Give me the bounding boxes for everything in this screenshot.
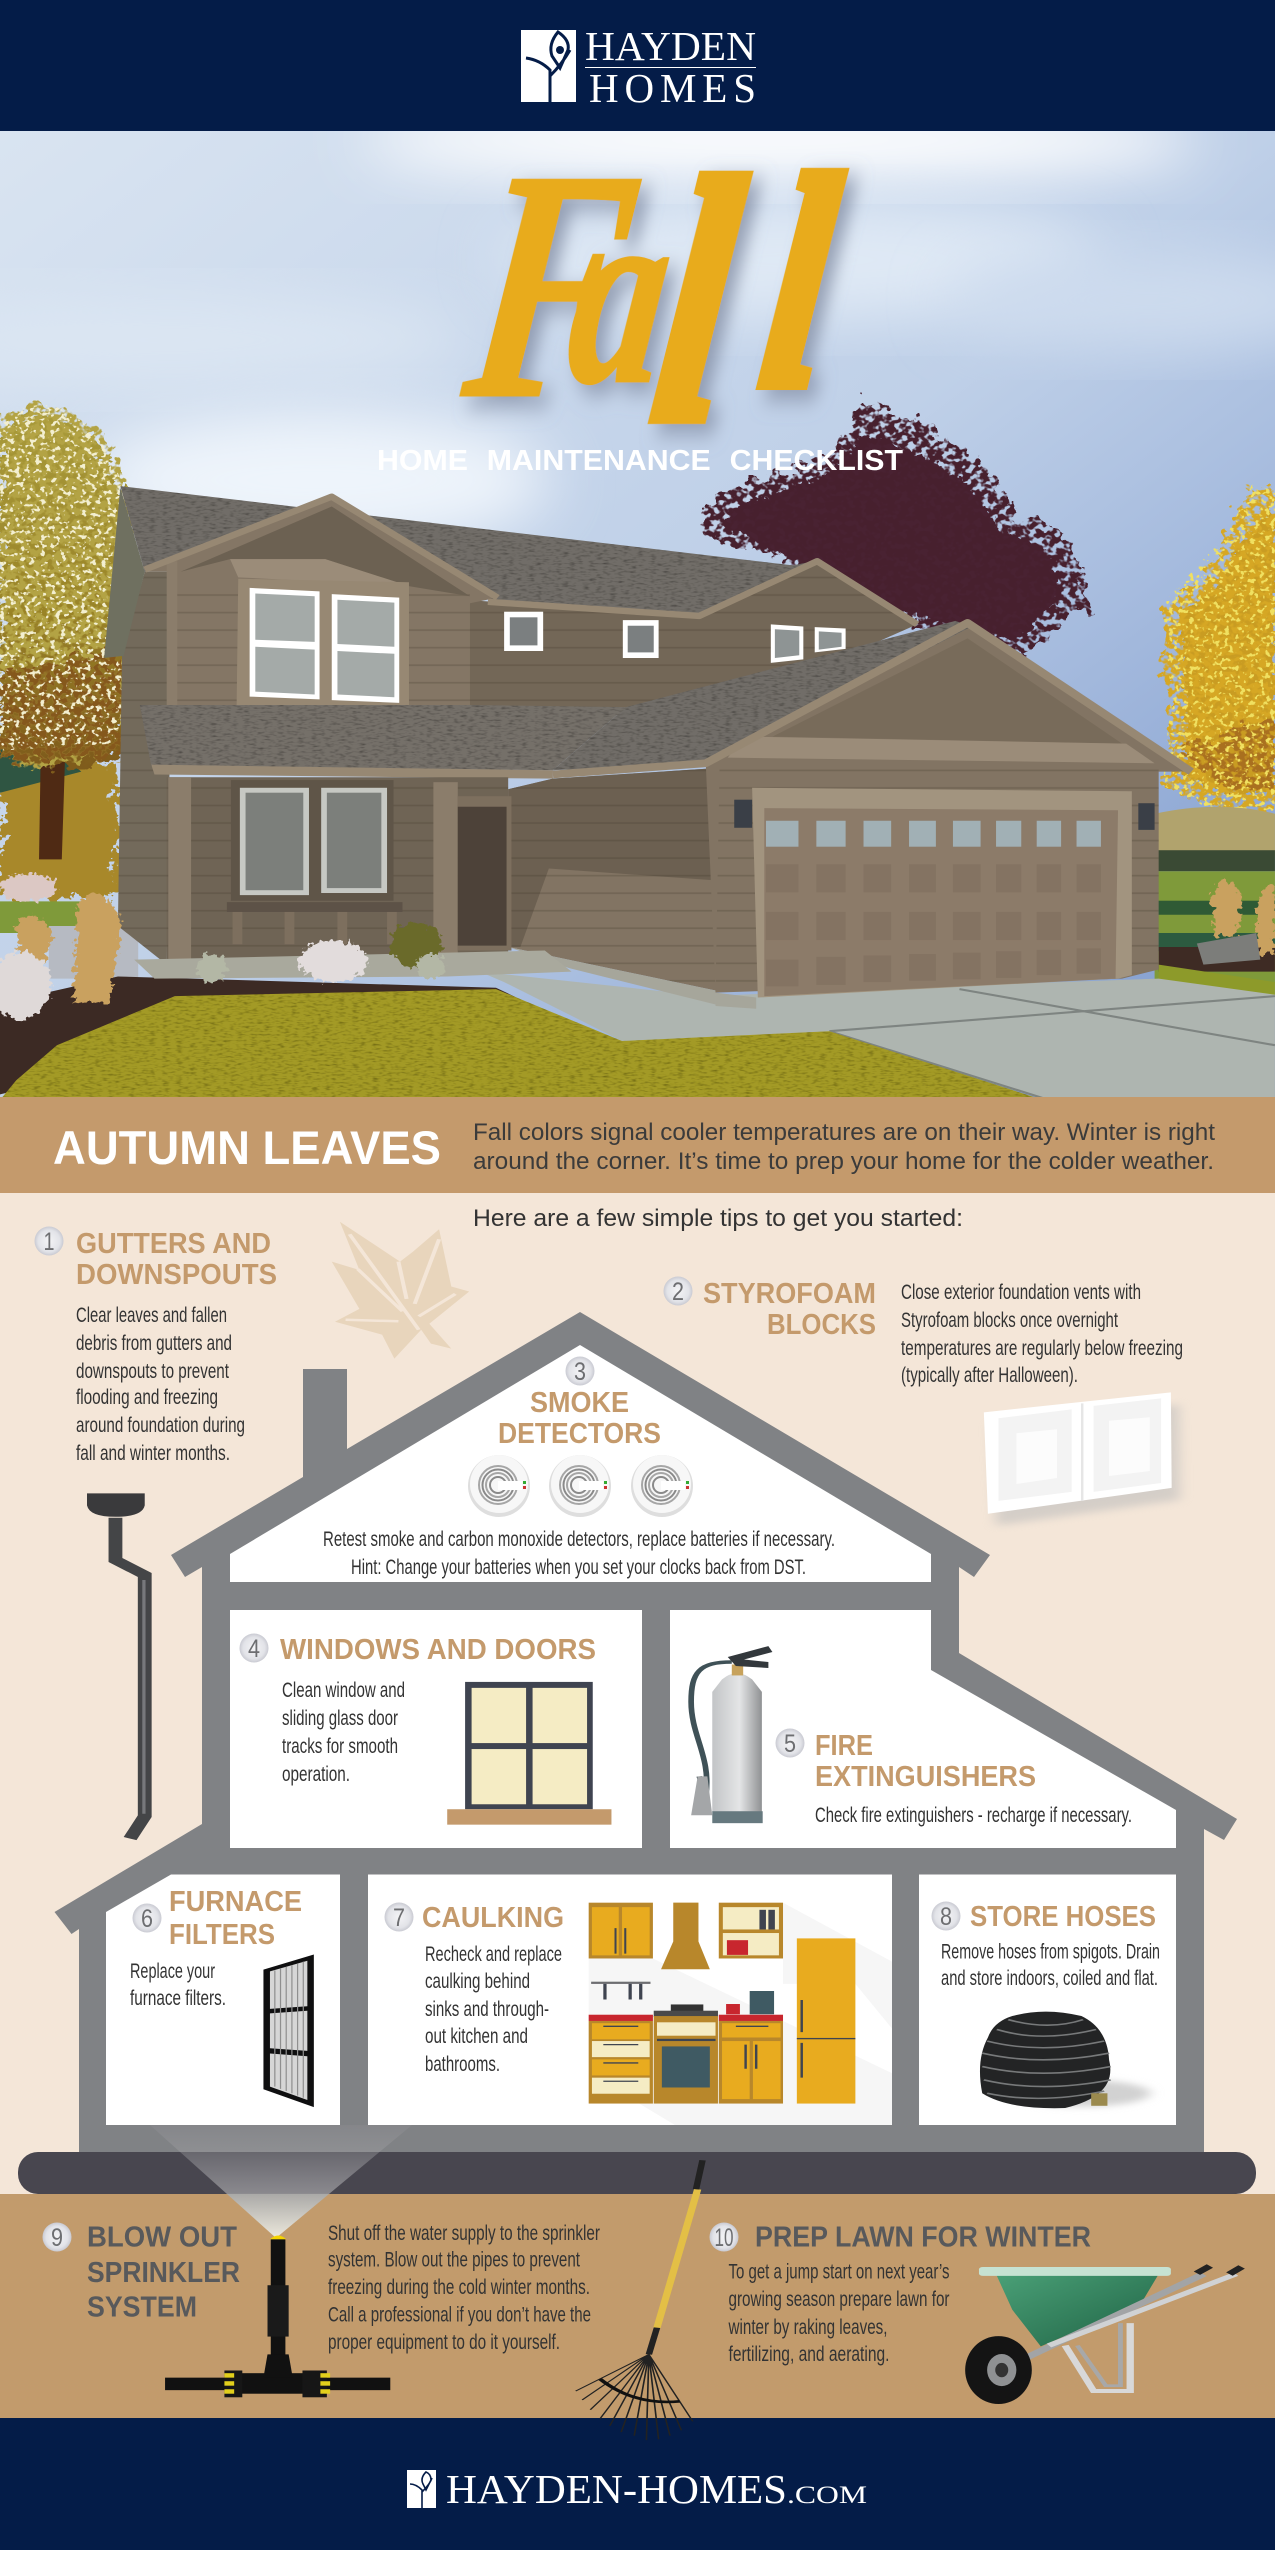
- body text: Clean window and: [282, 1679, 405, 1702]
- body text: fall and winter months.: [76, 1442, 230, 1465]
- house: garage roof: [553, 621, 972, 770]
- landscaping: shrubs and grasses: [0, 873, 1275, 1019]
- heading: BLOCKS: [767, 1309, 876, 1341]
- body text: winter by raking leaves,: [728, 2316, 888, 2339]
- icon: wheelbarrow: [965, 2266, 1242, 2404]
- body text: operation.: [282, 1763, 350, 1786]
- spotlight beam: [150, 2125, 412, 2238]
- body text: fertilizing, and aerating.: [728, 2343, 890, 2366]
- icon: logo tree pin: [407, 2470, 436, 2508]
- house: porch roof: [140, 705, 626, 770]
- body text: Styrofoam blocks once overnight: [901, 1309, 1118, 1332]
- body text: [76, 1304, 245, 1465]
- house: garage trim: [553, 623, 1191, 774]
- body text: Check fire extinguishers - recharge if necessary.: [815, 1804, 1132, 1827]
- subtitle: HOME MAINTENANCE CHECKLIST: [377, 445, 903, 477]
- heading: GUTTERS AND: [76, 1228, 271, 1260]
- foundation bar: [18, 2152, 1256, 2194]
- footer band: [0, 2418, 1275, 2550]
- header band: [0, 0, 1275, 131]
- tree: right yellow tree: [1163, 484, 1275, 814]
- icon: coiled hose: [980, 2012, 1151, 2108]
- house: upper roof: [120, 486, 821, 619]
- tips intro: Here are a few simple tips to get you started:: [473, 1205, 963, 1232]
- icon: downspout: [87, 1493, 145, 1839]
- tree: left autumn tree: [0, 405, 133, 898]
- body text: caulking behind: [425, 1970, 530, 1993]
- body text: debris from gutters and: [76, 1332, 232, 1355]
- ground: mulch, driveway and lawn: [0, 947, 1275, 1100]
- body text: Call a professional if you don’t have the: [328, 2304, 591, 2326]
- body text: Close exterior foundation vents with: [901, 1281, 1141, 1304]
- title: Fall: F: [448, 104, 654, 467]
- house: upper windows: [237, 579, 846, 712]
- intro text: around the corner. It’s time to prep your home for the colder weather.: [473, 1148, 1214, 1175]
- number badge: 3: [574, 1358, 586, 1386]
- icon: window: [447, 1682, 611, 1825]
- panel 3: smoke detectors: [230, 1345, 931, 1582]
- body text: [901, 1281, 1183, 1387]
- band: lawn section: [0, 2194, 1275, 2418]
- icon: sprinkler pipe: [165, 2235, 390, 2397]
- house: garage door: [716, 788, 1155, 1009]
- number badge: 10: [714, 2224, 734, 2252]
- number badge: [240, 1634, 268, 1663]
- number badge: [664, 1276, 692, 1306]
- intro text: [473, 1119, 1215, 1175]
- body text: downspouts to prevent: [76, 1360, 229, 1383]
- body text: freezing during the cold winter months.: [328, 2276, 590, 2299]
- icon: maple leaf: [332, 1222, 469, 1359]
- house: steps: [134, 951, 572, 979]
- body text: proper equipment to do it yourself.: [328, 2331, 560, 2354]
- heading: [815, 1730, 1036, 1793]
- number badge: 4: [248, 1635, 260, 1663]
- heading: FIRE: [815, 1730, 873, 1762]
- footer logo: .COM: [787, 2482, 867, 2509]
- intro text: Fall colors signal cooler temperatures are on their way. Winter is right: [473, 1119, 1215, 1146]
- logo: Hayden Homes: HAYDEN: [585, 23, 756, 69]
- body text: Hint: Change your batteries when you set your clocks back from DST.: [351, 1556, 806, 1579]
- heading: CAULKING: [422, 1902, 564, 1934]
- body text: [425, 1943, 562, 2076]
- body text: [728, 2260, 950, 2366]
- body text: [130, 1960, 226, 2010]
- body text: and store indoors, coiled and flat.: [941, 1967, 1158, 1990]
- body text: [941, 1940, 1160, 1990]
- heading: SMOKE: [530, 1387, 629, 1419]
- body text: (typically after Halloween).: [901, 1364, 1078, 1387]
- heading: [87, 2222, 240, 2324]
- number badge: [132, 1904, 162, 1933]
- icon: smoke detectors: [468, 1455, 693, 1517]
- body text: Retest smoke and carbon monoxide detectors, replace batteries if necessary.: [323, 1528, 835, 1551]
- body text: sinks and through-: [425, 1998, 549, 2021]
- number badge: [776, 1728, 804, 1758]
- heading: [498, 1387, 661, 1450]
- body text: growing season prepare lawn for: [728, 2288, 950, 2311]
- sky with clouds: [0, 100, 1275, 1098]
- title: Fall: l: [749, 116, 851, 448]
- heading: DOWNSPOUTS: [76, 1259, 277, 1291]
- number badge: [566, 1356, 594, 1386]
- body text: Recheck and replace: [425, 1943, 562, 1966]
- background hills and fields: [0, 807, 1275, 984]
- house outline: [54, 1312, 1237, 2152]
- number badge: 1: [44, 1228, 54, 1256]
- body text: system. Blow out the pipes to prevent: [328, 2248, 580, 2272]
- house: middle wall: [463, 561, 917, 716]
- tip 9: sprinkler: [42, 2222, 600, 2397]
- icon: kitchen: [589, 1903, 892, 2125]
- heading: STYROFOAM: [703, 1278, 876, 1310]
- house: lower walls: [167, 777, 508, 961]
- body text: out kitchen and: [425, 2025, 528, 2048]
- panel 6: furnace filters: [106, 1874, 340, 2125]
- icon: logo tree pin: [521, 30, 576, 102]
- panel 8: store hoses: [919, 1874, 1176, 2125]
- tip 2: styrofoam: [664, 1276, 1183, 1387]
- logo: Hayden Homes: HOMES: [589, 65, 756, 111]
- tip 10: lawn: [710, 2222, 1242, 2404]
- number badge: [932, 1902, 960, 1931]
- body text: [328, 2222, 600, 2354]
- body text: Remove hoses from spigots. Drain: [941, 1940, 1160, 1964]
- heading: WINDOWS AND DOORS: [280, 1634, 596, 1666]
- icon: air filter: [263, 1954, 314, 2107]
- panel 7: caulking: [368, 1874, 892, 2125]
- body text: sliding glass door: [282, 1707, 398, 1730]
- body text: tracks for smooth: [282, 1735, 398, 1758]
- band: Autumn Leaves: [0, 1097, 1275, 1193]
- house: shingled gable: [772, 638, 1122, 744]
- number badge: 9: [51, 2224, 63, 2252]
- body text: flooding and freezing: [76, 1386, 218, 1409]
- panel: hero scene: [0, 100, 1275, 1100]
- house: porch pillars and door: [167, 777, 511, 975]
- heading: BLOW OUT: [87, 2222, 237, 2254]
- number badge: [34, 1226, 64, 1256]
- icon: fire extinguisher: [691, 1646, 772, 1823]
- heading: [76, 1228, 277, 1291]
- number badge: [710, 2222, 738, 2252]
- number badge: 6: [141, 1905, 153, 1933]
- body text: Clear leaves and fallen: [76, 1304, 227, 1327]
- body text: furnace filters.: [130, 1987, 226, 2010]
- title: Fall: l: [640, 111, 756, 492]
- body text: [323, 1528, 835, 1579]
- body text: Shut off the water supply to the sprinkler: [328, 2222, 600, 2245]
- icon: styrofoam block: [984, 1392, 1180, 1526]
- footer logo: HAYDEN-HOMES: [446, 2466, 787, 2512]
- number badge: 5: [784, 1730, 796, 1758]
- number badge: 2: [672, 1278, 684, 1306]
- number badge: [42, 2222, 72, 2252]
- heading: AUTUMN LEAVES: [53, 1121, 441, 1174]
- number badge: 7: [393, 1904, 405, 1932]
- heading: DETECTORS: [498, 1418, 661, 1450]
- heading: FILTERS: [169, 1919, 275, 1951]
- heading: [169, 1886, 302, 1951]
- number badge: 8: [940, 1903, 952, 1931]
- house: gable trims: [145, 497, 917, 624]
- house: garage wall: [706, 623, 1191, 993]
- number badge: [384, 1902, 414, 1932]
- heading: [703, 1278, 876, 1341]
- panel 5: fire extinguishers: [670, 1610, 1176, 1848]
- heading: SYSTEM: [87, 2292, 197, 2324]
- house: upper gable wall: [145, 497, 498, 717]
- house: lower windows and planter: [227, 780, 402, 944]
- house: left side wall: [118, 572, 172, 965]
- heading: SPRINKLER: [87, 2257, 240, 2289]
- body text: bathrooms.: [425, 2053, 500, 2076]
- heading: EXTINGUISHERS: [815, 1761, 1036, 1793]
- body text: To get a jump start on next year’s: [728, 2260, 950, 2284]
- heading: STORE HOSES: [970, 1901, 1156, 1933]
- body text: around foundation during: [76, 1414, 245, 1437]
- logo: Hayden Homes: [521, 23, 756, 111]
- body text: Replace your: [130, 1960, 215, 1983]
- body text: [282, 1679, 405, 1786]
- panel 4: windows and doors: [230, 1610, 642, 1848]
- tree: purple maple: [699, 400, 1086, 652]
- heading: PREP LAWN FOR WINTER: [755, 2222, 1091, 2254]
- heading: FURNACE: [169, 1886, 302, 1918]
- icon: rake: [576, 2160, 703, 2440]
- tip 1: gutters: [34, 1226, 277, 1465]
- title: Fall: a: [556, 148, 686, 438]
